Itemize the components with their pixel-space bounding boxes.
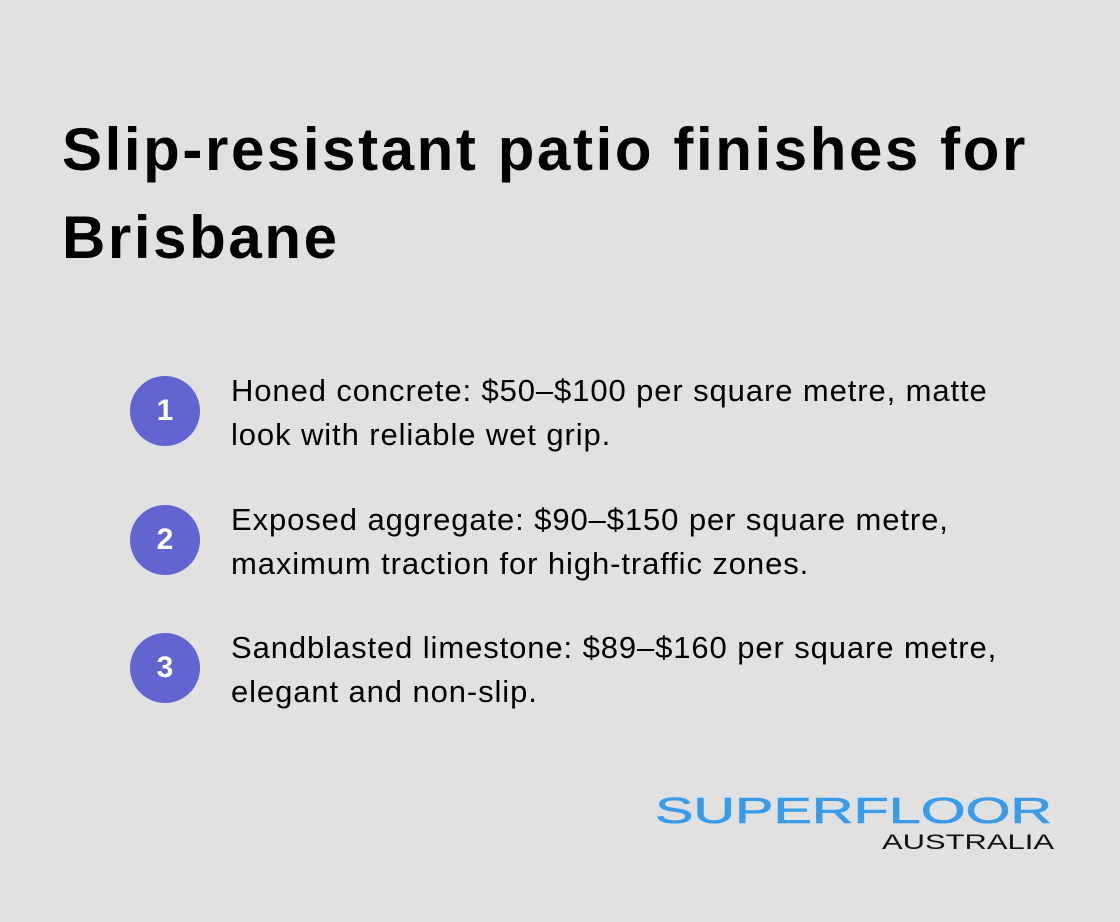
number badge 1 bbox=[130, 376, 200, 446]
number badge 2: 2 bbox=[157, 523, 173, 556]
text 2: Exposed aggregate: $90–$150 per square metre, maximum traction for high-traffic zones. bbox=[231, 502, 949, 581]
number badge 3: 3 bbox=[157, 651, 173, 684]
number badge 2 bbox=[130, 505, 200, 575]
item 3 bbox=[130, 630, 997, 709]
number badge 3 bbox=[130, 633, 200, 703]
title: Slip-resistant patio finishes for Brisbane bbox=[62, 116, 1028, 271]
logo bbox=[655, 792, 1054, 852]
text 1: Honed concrete: $50–$100 per square metre, matte look with reliable wet grip. bbox=[231, 373, 988, 452]
text 3: Sandblasted limestone: $89–$160 per square metre, elegant and non-slip. bbox=[231, 630, 997, 709]
item 2 bbox=[130, 502, 949, 581]
number badge 1: 1 bbox=[157, 394, 173, 427]
item 1 bbox=[130, 373, 988, 452]
